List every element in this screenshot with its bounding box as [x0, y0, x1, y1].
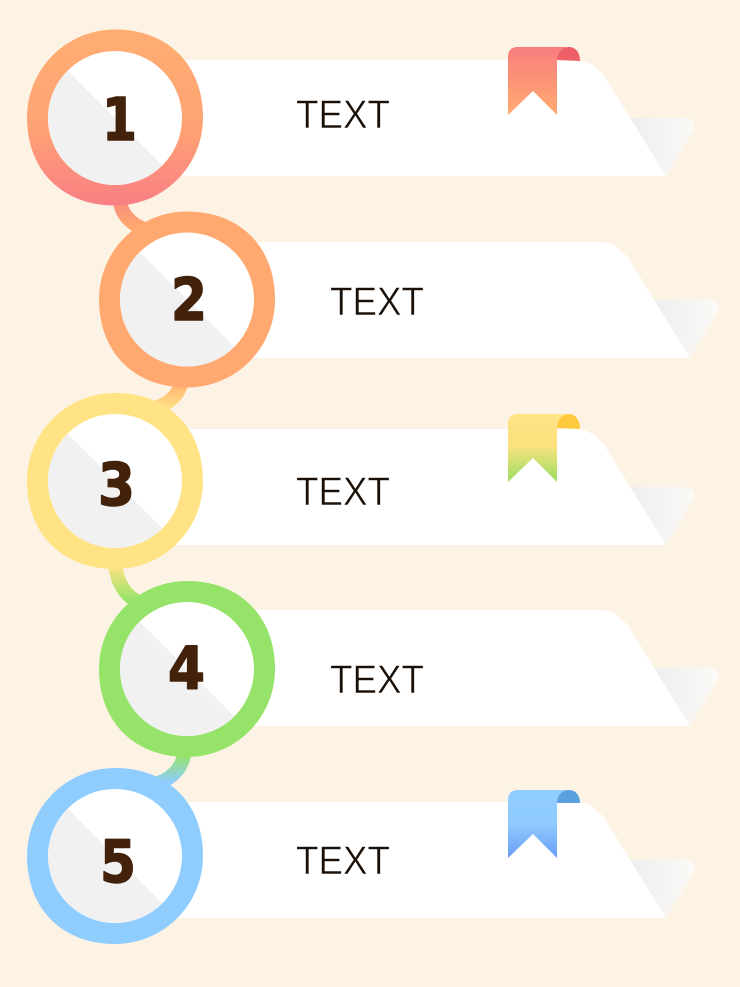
- connector 4 to 5: [155, 750, 185, 784]
- marker 4: [99, 581, 275, 757]
- marker 1: 1: [102, 85, 137, 154]
- panel: band 3: [150, 429, 695, 545]
- connector 2 to 3: [152, 380, 182, 409]
- marker 2: 2: [171, 265, 207, 334]
- marker 4: 4: [168, 634, 205, 703]
- text: label 1: TEXT: [296, 93, 390, 137]
- icon: bookmark 3: [508, 414, 580, 482]
- panel: band 2: [174, 242, 719, 358]
- marker 3: [27, 393, 203, 569]
- marker 3: 3: [98, 450, 135, 519]
- text: label 4: TEXT: [330, 658, 424, 702]
- panel: band 1: [150, 60, 695, 176]
- marker 2: [99, 212, 275, 388]
- text: label 3: TEXT: [296, 470, 390, 514]
- icon: bookmark 5: [508, 790, 580, 858]
- connector 3 to 4: [115, 562, 140, 603]
- marker 5: [27, 768, 203, 944]
- connector 1 to 2: [119, 198, 147, 230]
- marker 5: 5: [100, 827, 136, 896]
- text: label 2: TEXT: [330, 280, 424, 324]
- icon: bookmark 1: [508, 47, 580, 115]
- text: label 5: TEXT: [296, 839, 390, 883]
- marker 1: [27, 30, 203, 206]
- panel: band 4: [174, 610, 719, 726]
- panel: band 5: [150, 802, 695, 918]
